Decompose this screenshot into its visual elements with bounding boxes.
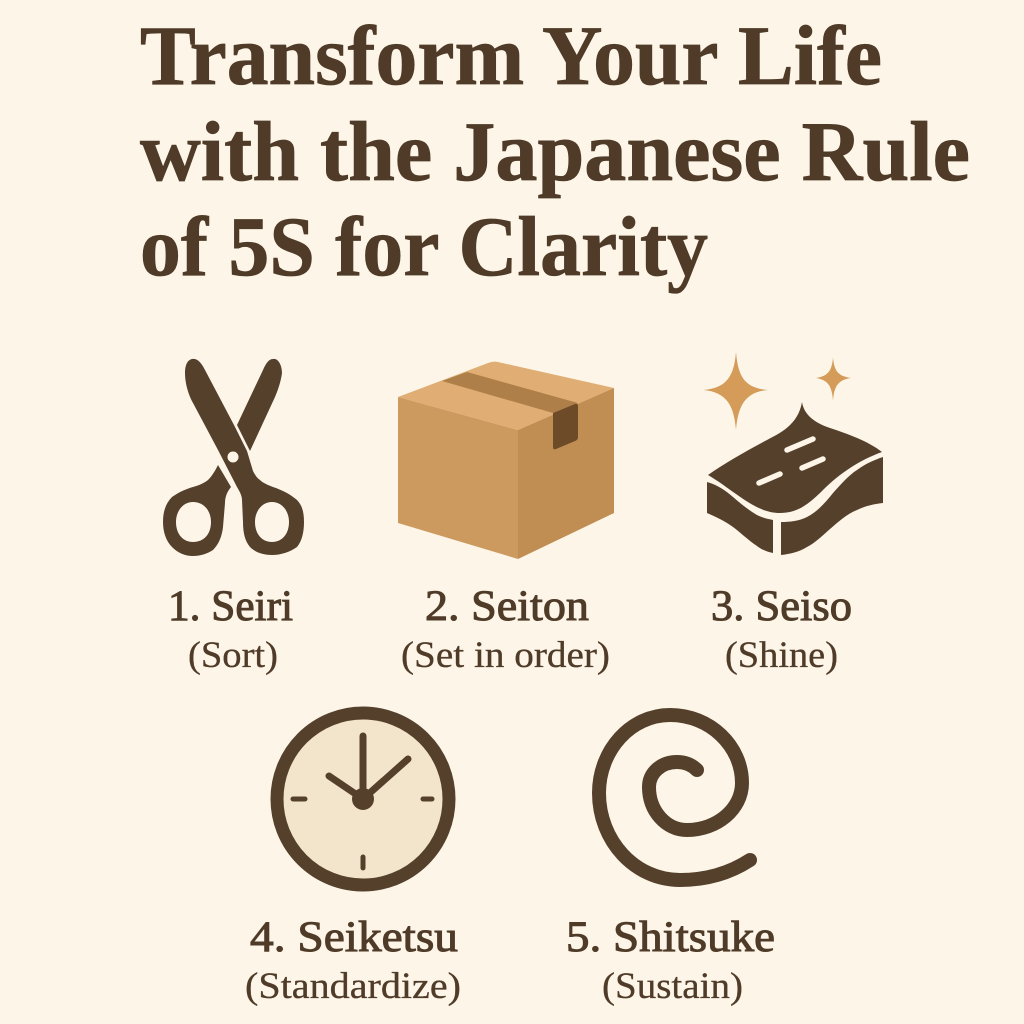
icon: spiral bbox=[599, 715, 750, 880]
label: Shitsuke: 5. Shitsuke bbox=[566, 914, 775, 961]
tape flap bbox=[553, 404, 578, 449]
label: Shitsuke: (Sustain) bbox=[602, 966, 743, 1007]
sponge top bbox=[708, 402, 882, 513]
icon: scissors bbox=[163, 359, 304, 556]
label: Seiri bbox=[168, 583, 293, 676]
label: Seiton: (Set in order) bbox=[401, 635, 610, 676]
small sparkle bbox=[816, 357, 851, 401]
box top face bbox=[398, 362, 614, 430]
sponge highlights bbox=[759, 439, 823, 483]
title bbox=[140, 9, 970, 294]
packing tape bbox=[442, 372, 578, 413]
icon: clock bbox=[277, 713, 449, 885]
label: Seiketsu bbox=[245, 914, 461, 1007]
large sparkle bbox=[703, 352, 768, 430]
icon: sponge with sparkles bbox=[703, 352, 883, 555]
box front face bbox=[398, 397, 518, 559]
label: Seiton: 2. Seiton bbox=[425, 583, 589, 630]
box right face bbox=[518, 388, 614, 559]
sponge left side bbox=[707, 482, 773, 553]
title: with the Japanese Rule bbox=[140, 105, 970, 199]
label: Seiso: (Shine) bbox=[725, 635, 838, 676]
label: Seiri: (Sort) bbox=[188, 635, 278, 676]
title: of 5S for Clarity bbox=[140, 200, 708, 294]
title: Transform Your Life bbox=[140, 9, 882, 103]
label: Seiso: 3. Seiso bbox=[711, 583, 852, 630]
label: Seiri: 1. Seiri bbox=[168, 583, 293, 630]
sponge right side bbox=[781, 457, 883, 555]
label: Seiso bbox=[711, 583, 852, 676]
icon: cardboard box bbox=[398, 362, 614, 559]
label: Seiketsu: (Standardize) bbox=[245, 966, 461, 1007]
label: Shitsuke bbox=[566, 914, 775, 1007]
label: Seiketsu: 4. Seiketsu bbox=[250, 914, 458, 961]
label: Seiton bbox=[401, 583, 610, 676]
